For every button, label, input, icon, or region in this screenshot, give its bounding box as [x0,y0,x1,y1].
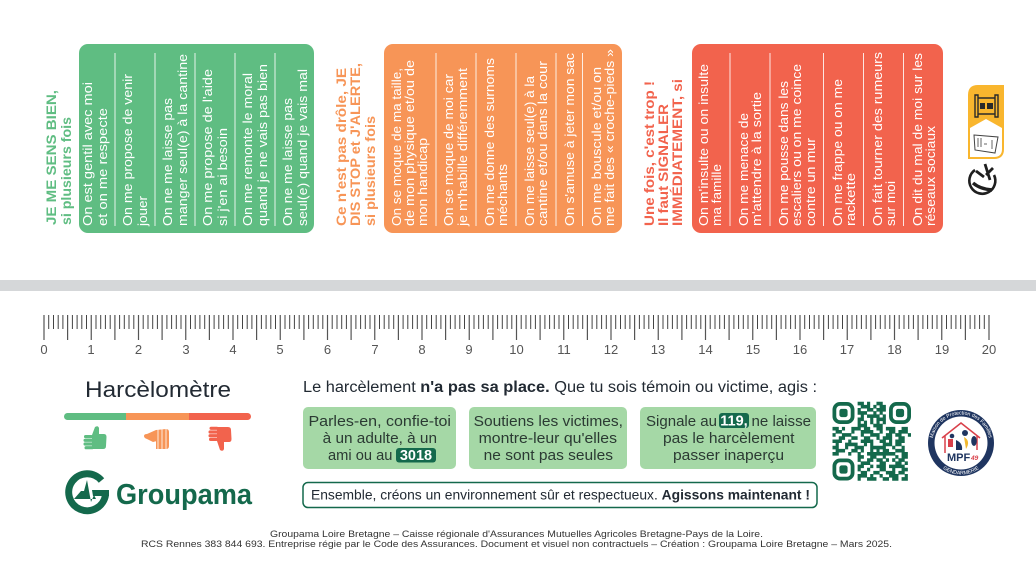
ruler: 20 [982,342,996,357]
action card: support [469,407,627,469]
heading: je me sens bien [44,90,74,225]
title: Harcèlomètre: Harcèlomètre [85,377,231,402]
panel: green behaviours: On me remonte le moral [241,73,255,226]
callout: act now: Ensemble, créons un environnement sûr et respectueux. Agissons maintenant ! [311,488,810,502]
panel: green behaviours: et on me respecte [96,108,110,226]
logo: MPF 49 gendarmerie badge: 49 [970,455,979,462]
icon: thumb down [208,427,232,451]
panel: orange behaviours: On me bouscule et/ou on [590,67,604,226]
grey separator band [0,280,1036,291]
icon: recycling swirl [969,164,995,194]
heading: il faut signaler: Une fois, c'est trop ! [642,81,657,226]
action card: report: ne laisse [752,414,811,430]
action card: report [640,407,816,469]
heading: il faut signaler [642,79,685,226]
ruler: 2 [135,342,142,357]
panel: red behaviours: m'attendre à la sortie [750,92,764,226]
QR code [832,404,911,479]
ruler: 5 [276,342,284,357]
ruler: 10 [509,342,524,357]
action card: confide [303,407,456,469]
panel: orange behaviours: méchants [496,164,510,226]
panel: green behaviours: On me propose de l'aide [201,69,215,226]
action card: report: pas le harcèlement [663,431,794,447]
ruler: 15 [746,342,760,357]
logo: Groupama [69,474,253,511]
panel: orange behaviours: On s'amuse à jeter mon sac [563,53,577,226]
ruler: 14 [698,342,713,357]
panel: orange behaviours: de mon physique et/ou de [403,60,417,226]
legal footer: RCS Rennes 383 844 693. Entreprise régie par le Code des Assurances. Document et visuel non contractuels – Création : Groupama Loire Bretagne – Mars 2025. [141,539,892,550]
intro sentence: Le harcèlement n'a pas sa place. Que tu sois témoin ou victime, agis : [303,379,817,396]
ruler: 7 [371,342,379,357]
panel: orange behaviours: On se moque de ma taille, [390,68,404,226]
panel: red behaviours: On me menace de [737,113,751,226]
panel: green behaviours: On ne me laisse pas [281,98,295,226]
panel: red behaviours: contre un mur [804,138,818,226]
heading: il faut signaler: Il faut SIGNALER [656,104,671,226]
action card: confide: à un adulte, à un [323,431,437,447]
panel: red behaviours: sur moi [884,181,898,226]
panel: green behaviours: On est gentil avec moi [81,82,95,226]
panel: red behaviours: On me pousse dans les [777,81,791,226]
heading: je dis stop et j'alerte: Ce n'est pas drôle, JE [334,68,349,226]
logo: MPF 49 gendarmerie badge: GENDARMERIE [944,466,979,474]
ruler: 0 [40,342,48,357]
panel: orange behaviours: On me donne des surnoms [483,58,497,226]
action card: confide: 3018 [400,448,432,464]
panel: red behaviours: On dit du mal de moi sur les [911,53,925,226]
panel: orange behaviours [384,44,622,233]
panel: green behaviours: seul(e) quand je vais mal [296,69,310,226]
panel: red behaviours: réseaux sociaux [924,125,938,226]
action card: report: 119, [720,414,748,430]
ruler: 1 [87,342,95,357]
action card: support: ne sont pas seules [484,448,613,464]
action card: confide: ami ou au [328,448,392,464]
legal footer [141,529,892,550]
panel: green behaviours: quand je ne vais pas bien [256,64,270,226]
action card: confide: Parles-en, confie-toi [308,414,451,430]
panel: red behaviours: On fait tourner des rumeurs [871,52,885,226]
panel: green behaviours: si j'en ai besoin [216,128,230,226]
panel: red behaviours: escaliers ou on me coince [790,64,804,226]
panel: red behaviours: On m'insulte ou on insulte [697,64,711,226]
panel: orange behaviours: mon handicap [416,138,430,226]
legal footer: Groupama Loire Bretagne – Caisse régionale d'Assurances Mutuelles Agricoles Bretagne-Pays de la Loire. [270,529,763,540]
ruler: 8 [418,342,426,357]
panel: green behaviours: jouer [136,196,150,227]
panel: red behaviours: rackette [844,173,858,226]
ruler: 3 [182,342,190,357]
action card: support: montre-leur qu'elles [479,431,617,447]
panel: orange behaviours: me fait des « croche-pieds » [603,49,617,226]
action card: report: Signale au [646,414,717,430]
icon: recycling sorting label [968,85,1004,159]
panel: red behaviours: ma famille [710,164,724,226]
action card: report: passer inaperçu [673,448,784,464]
ruler: 18 [887,342,902,357]
ruler: 11 [557,342,571,357]
heading: je dis stop et j'alerte: DIS STOP et J'ALERTE, [348,63,363,226]
ruler [40,315,996,357]
heading: il faut signaler: IMMÉDIATEMENT, si [670,79,685,226]
icon: thumb sideways [144,429,169,449]
panel: green behaviours: manger seul(e) à la cantine [176,54,190,226]
ruler: 13 [651,342,665,357]
panel: green behaviours: On me propose de venir [121,74,135,226]
heading: je me sens bien: JE ME SENS BIEN, [44,90,59,225]
ruler: 4 [229,342,237,357]
heading: je dis stop et j'alerte [334,63,378,226]
panel: red behaviours: On me frappe ou on me [831,79,845,226]
logo: Groupama: Groupama [116,479,253,511]
panel: green behaviours: On ne me laisse pas [161,98,175,226]
gauge bar [64,413,251,420]
panel: orange behaviours: On se moque de moi car [442,74,456,226]
ruler: 9 [465,342,473,357]
heading: je dis stop et j'alerte: si plusieurs fois [363,116,378,226]
panel: green behaviours [79,44,314,233]
icon: thumb up [84,426,106,449]
panel: orange behaviours: On me laisse seul(e) à la [523,76,537,226]
ruler: 17 [840,342,854,357]
panel: orange behaviours: cantine et/ou dans la cour [536,61,550,226]
heading: je me sens bien: si plusieurs fois [59,117,74,225]
panel: red behaviours [692,44,943,233]
action card: support: Soutiens les victimes, [474,414,623,430]
ruler: 16 [793,342,807,357]
panel: orange behaviours: je m'habille différemment [456,67,470,227]
logo: MPF 49 gendarmerie badge: Maison de Protection des Familles [930,410,992,438]
ruler: 19 [935,342,949,357]
ruler: 6 [324,342,331,357]
ruler: 12 [604,342,618,357]
callout: act now [303,482,817,508]
logo: MPF 49 gendarmerie badge: MPF [947,452,970,464]
logo: MPF 49 gendarmerie badge [928,410,994,476]
